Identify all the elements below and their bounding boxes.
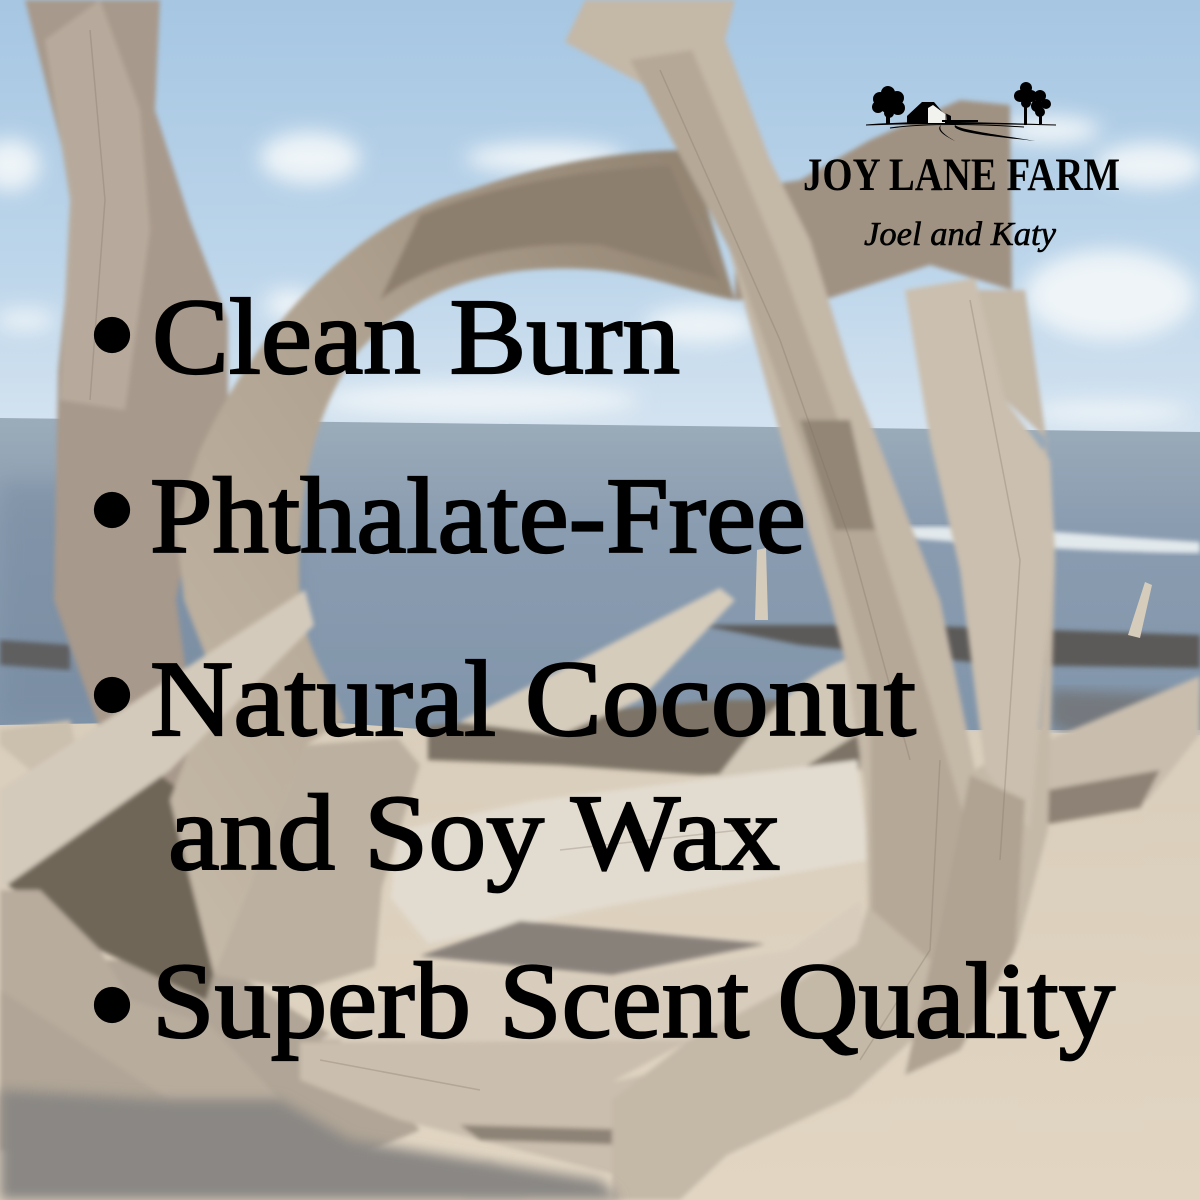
bullet: Natural Coconut and Soy Wax [95, 640, 916, 893]
lower log [300, 1020, 930, 1174]
bullet: Superb Scent Quality: Superb Scent Quality [152, 942, 1115, 1061]
icon: farm scene with trees and house [866, 82, 1056, 141]
shadow on sand [420, 921, 765, 975]
dark cavity [0, 760, 260, 1000]
upper right stub joining arc [735, 100, 1012, 300]
shaded base lower left [0, 1090, 620, 1200]
bullet: Natural Coconut and Soy Wax: Natural Coconut [150, 640, 916, 759]
stump [0, 890, 280, 1100]
big arc [170, 150, 735, 975]
bullet list [95, 278, 1115, 1061]
wordmark: JOY LANE FARM [803, 149, 1120, 201]
left trunk [25, 0, 260, 790]
pale rock [455, 1158, 530, 1200]
wood grain streaks [90, 30, 1020, 1090]
tall lower log [214, 738, 420, 990]
bullet: Phthalate-Free: Phthalate-Free [150, 457, 806, 576]
right main branch [565, 0, 1055, 1200]
bullet: Clean Burn: Clean Burn [152, 278, 680, 397]
bullet: Natural Coconut and Soy Wax: and Soy Wax [168, 774, 780, 893]
tagline: Joel and Katy [864, 216, 1057, 253]
lower-left base log [0, 960, 420, 1180]
middle pale log [390, 760, 870, 944]
logo [803, 82, 1120, 253]
horizontal back log and underside [428, 700, 860, 775]
pale foreground log [0, 590, 314, 890]
right background log [1048, 676, 1200, 824]
